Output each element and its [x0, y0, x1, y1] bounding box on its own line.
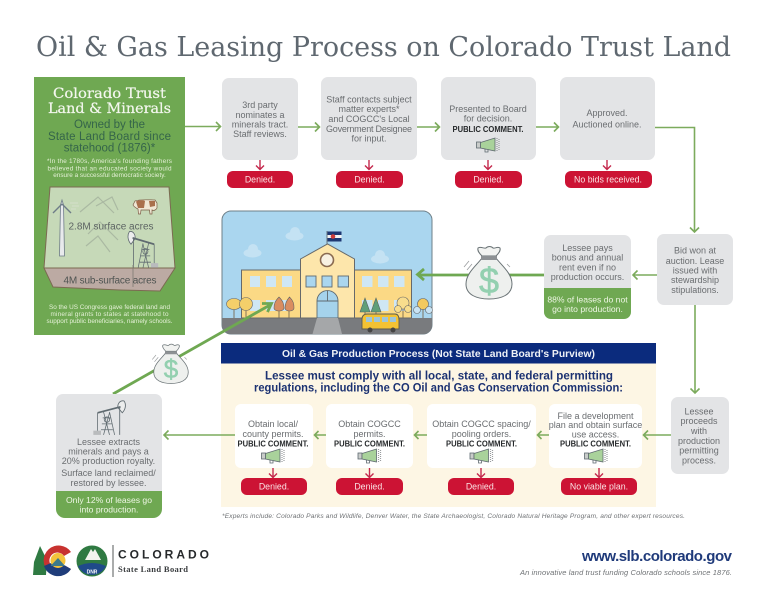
icon: money bag bonus [464, 246, 512, 299]
permit box: COGCC permits [326, 404, 413, 468]
bid won box [657, 234, 733, 305]
lessee pays box: rent even if no [559, 262, 616, 272]
arrow: step 4 to bid won [655, 128, 699, 232]
denied outcomes bottom row [241, 468, 637, 495]
lessee extracts box: Lessee extracts [77, 437, 141, 447]
icon: Colorado C [44, 546, 71, 576]
flag [327, 231, 342, 244]
permit box: local county [235, 404, 313, 468]
lessee pays box: go into production. [552, 304, 623, 314]
permit box: COGCC permits: permits. [353, 429, 386, 439]
ownership statement: Owned by the [74, 119, 145, 131]
lessee pays box: Lessee pays [562, 243, 613, 253]
website url: www.slb.colorado.gov [581, 548, 733, 565]
ownership statement: State Land Board since [48, 131, 171, 143]
lessee proceeds box: proceeds [680, 416, 718, 426]
clouds [244, 227, 389, 264]
permit box: spacing pooling: Obtain COGCC spacing/ [432, 419, 531, 429]
step 1: nominate: 3rd party [242, 100, 278, 110]
step 1: nominate: nominates a [235, 110, 285, 120]
permit box: local county: county permits. [242, 429, 304, 439]
compliance statement: Lessee must comply with all local, state, and federal permitting [265, 370, 613, 382]
title: Oil & Gas Leasing Process on Colorado Trust Land [36, 31, 731, 63]
panel header bar [221, 343, 656, 364]
arrow: bonus to school [418, 269, 544, 280]
icon: pump jack [128, 231, 158, 268]
trees [226, 297, 432, 318]
icon: wind turbine [53, 200, 79, 256]
icon: DNR seal [76, 546, 108, 576]
arrow: step 3 to step 4 [536, 122, 558, 132]
ownership statement: statehood (1876)* [64, 142, 156, 154]
denied outcomes bottom row: No viable plan. [570, 482, 628, 492]
step 2: staff contacts [321, 77, 417, 160]
permit box: development plan: PUBLIC COMMENT. [560, 438, 631, 448]
permit box: local county: PUBLIC COMMENT. [238, 438, 308, 448]
logo subtitle: State Land Board [118, 564, 188, 574]
lessee pays box: production occurs. [551, 272, 624, 282]
compliance statement: regulations, including the CO Oil and Gas Conservation Commission: [254, 382, 623, 394]
logo wordmark: COLORADO [118, 548, 209, 562]
founding fathers note [47, 158, 172, 179]
lessee pays box [544, 235, 631, 319]
lessee pays box: bonus and annual [552, 252, 623, 262]
sub-surface acres label: 4M sub-surface acres [64, 276, 156, 286]
permit box: COGCC permits: PUBLIC COMMENT. [334, 438, 405, 448]
panel heading: Land & Minerals [48, 101, 171, 117]
door [317, 291, 338, 318]
step 1: nominate: Staff reviews. [233, 129, 287, 139]
arrow: local permits to lessee extracts [164, 430, 235, 440]
lessee proceeds box: Lessee [684, 406, 714, 416]
icon: cow [133, 200, 157, 214]
step 2: staff contacts: matter experts* [338, 104, 400, 114]
arrow: step 2 to step 3 [417, 122, 440, 132]
icon: DNR seal: DNR [87, 570, 98, 576]
step 2: staff contacts: Government Designee [326, 124, 412, 134]
step 3: presented to board: Presented to Board [449, 104, 527, 114]
school wings [242, 270, 412, 318]
bid won box: Bid won at [674, 246, 717, 256]
land grant note: So the US Congress gave federal land and [49, 304, 170, 311]
denied outcomes top row: Denied. [245, 174, 275, 184]
lessee extracts box: Only 12% of leases go [66, 495, 152, 505]
central building [300, 244, 354, 318]
permit box: spacing pooling [427, 404, 536, 468]
permit box: spacing pooling: pooling orders. [452, 429, 511, 439]
bid won box: stewardship [671, 275, 719, 285]
land grant note [46, 304, 173, 325]
step 4: approved [560, 77, 655, 160]
permit box: development plan [549, 404, 642, 468]
center windows [306, 276, 348, 287]
icon: tree [33, 546, 47, 575]
icon: megaphone [476, 138, 499, 152]
tagline: An innovative land trust funding Colorado schools since 1876. [519, 568, 732, 577]
bid won box: auction. Lease [666, 256, 724, 266]
dollar sign royalty: $ [164, 354, 179, 384]
surface acres label: 2.8M surface acres [68, 222, 154, 232]
denied outcomes top row: No bids received. [574, 174, 642, 184]
arrows between permit boxes [314, 431, 549, 439]
land grant note: mineral grants to states at statehood to [50, 311, 169, 318]
step 2: staff contacts: for input. [351, 134, 387, 144]
lessee extracts box: restored by lessee. [70, 478, 147, 488]
denied outcomes bottom row: Denied. [354, 482, 385, 492]
school bus [362, 314, 399, 332]
permit box: development plan: plan and obtain surface [549, 420, 642, 430]
arrow: step 1 to step 2 [298, 122, 320, 132]
land block illustration [44, 187, 175, 291]
founding fathers note: *In the 1780s, America's founding fathers [47, 158, 172, 165]
denied outcomes top row [227, 160, 652, 188]
bid won box: stipulations. [671, 285, 719, 295]
permit box: spacing pooling: PUBLIC COMMENT. [446, 438, 517, 448]
step 3: presented to board [441, 77, 536, 160]
lessee extracts box: minerals and pays a [68, 446, 149, 456]
lessee pays box: 88% of leases do not [547, 294, 628, 304]
permit box: development plan: File a development [557, 411, 634, 421]
illustration: school [222, 211, 432, 334]
lessee proceeds box [671, 397, 729, 474]
step 2: staff contacts: and COGCC's Local [328, 114, 410, 124]
denied outcomes top row: Denied. [473, 174, 504, 184]
logo divider [112, 545, 114, 577]
denied outcomes bottom row: Denied. [466, 482, 496, 492]
arrow: panel to step 1 [185, 122, 220, 131]
lessee extracts box: Surface land reclaimed/ [61, 468, 156, 478]
permit box: COGCC permits: Obtain COGCC [338, 419, 401, 429]
icon: money bag royalty [152, 344, 188, 384]
footnote: *Experts include: Colorado Parks and Wildlife, Denver Water, the State Archaeologist, Colorado Natural Heritage Program, and other expert resources. [222, 513, 685, 520]
panel: Colorado Trust Land and Minerals [33, 77, 733, 577]
arrow: bid won to lessee pays [633, 270, 657, 280]
logo: Colorado and DNR [33, 545, 209, 577]
arrow: bid won to lessee proceeds [690, 305, 700, 393]
wing windows [250, 276, 404, 311]
permit box: development plan: use access. [572, 430, 619, 440]
icon: pump jack [93, 401, 125, 435]
panel heading: Colorado Trust [53, 86, 166, 102]
walkway [312, 318, 342, 334]
land grant note: support public beneficiaries, namely schools. [46, 318, 173, 325]
step 2: staff contacts: Staff contacts subject [326, 94, 412, 104]
denied outcomes top row: Denied. [354, 174, 385, 184]
arrow: lessee proceeds to development plan [644, 430, 671, 440]
denied outcomes bottom row: Denied. [259, 482, 289, 492]
founding fathers note: ensure a successful democratic society. [53, 172, 166, 179]
permit box: local county: Obtain local/ [248, 419, 299, 429]
step 3: presented to board: for decision. [464, 114, 512, 124]
step 1: nominate [222, 78, 298, 160]
lessee proceeds box: production [678, 436, 720, 446]
lessee extracts box: 20% production royalty. [62, 456, 155, 466]
lessee proceeds box: process. [682, 456, 716, 466]
panel: production process [221, 343, 656, 507]
panel heading [48, 86, 171, 117]
panel header text: Oil & Gas Production Process (Not State Land Board's Purview) [282, 348, 595, 360]
dollar sign bonus: $ [479, 260, 499, 301]
compliance statement [254, 370, 623, 394]
ownership statement [48, 119, 171, 154]
lessee extracts box: into production. [80, 504, 138, 514]
lessee proceeds box: with [690, 426, 707, 436]
lessee extracts box [56, 394, 162, 518]
step 1: nominate: minerals tract. [232, 120, 288, 130]
step 4: approved: Approved. [586, 108, 628, 118]
founding fathers note: believed that an educated society would [48, 166, 172, 172]
arrow: royalty to school [113, 304, 272, 394]
clock [320, 254, 334, 266]
lessee proceeds box: permitting [679, 446, 719, 456]
step 3: presented to board: PUBLIC COMMENT. [452, 124, 524, 134]
bid won box: issued with [673, 266, 717, 276]
step 4: approved: Auctioned online. [572, 120, 642, 130]
